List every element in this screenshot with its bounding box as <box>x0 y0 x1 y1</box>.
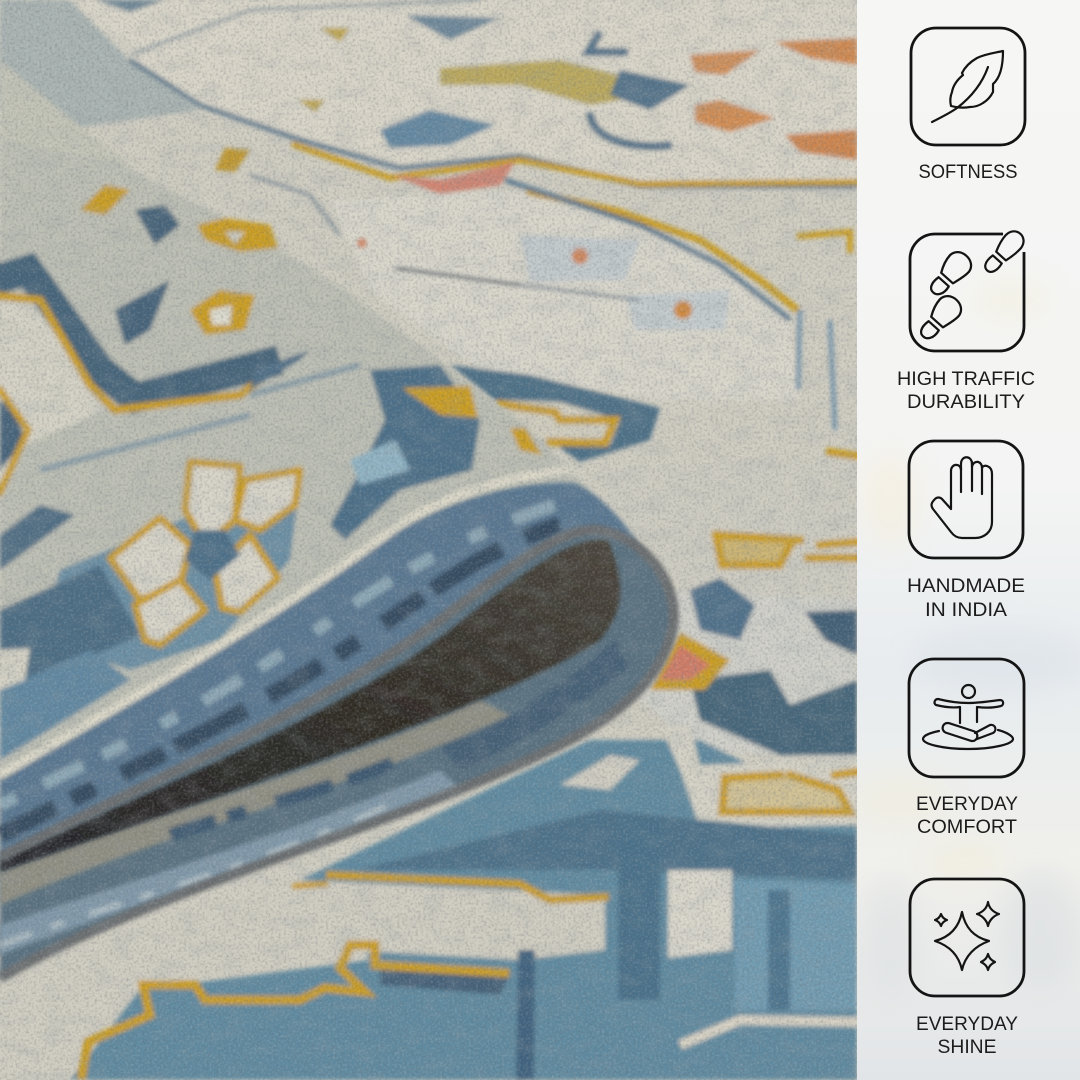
label: handmade in india <box>907 576 1025 621</box>
mottled and woven texture overlay <box>0 0 857 1080</box>
feature: handmade in india <box>907 441 1025 621</box>
label: everyday shine: EVERYDAY <box>916 1014 1018 1035</box>
label: handmade in india: HANDMADE <box>907 576 1025 597</box>
label: everyday comfort: EVERYDAY <box>916 794 1018 815</box>
icon: meditating figure <box>909 659 1024 777</box>
label: handmade in india: IN INDIA <box>925 600 1007 621</box>
icon: sparkles <box>910 879 1024 996</box>
ground rug: upper medallion <box>0 0 857 1080</box>
feature: everyday comfort <box>909 659 1024 838</box>
dark cavity under the fold <box>0 540 620 872</box>
icon: footprints <box>910 227 1028 351</box>
label: high traffic durability: DURABILITY <box>907 392 1025 413</box>
flower motif <box>110 462 300 645</box>
rolled rug flap <box>0 62 588 768</box>
fold underlay <box>0 530 674 978</box>
feature: high traffic durability <box>897 227 1035 413</box>
label: everyday comfort: COMFORT <box>917 817 1017 838</box>
label: everyday shine <box>916 1014 1018 1058</box>
front band of the fold <box>0 470 645 857</box>
icon: feather <box>911 28 1025 145</box>
label: high traffic durability <box>897 369 1035 413</box>
white feature panel <box>850 0 1080 1080</box>
label: everyday comfort <box>916 794 1018 838</box>
label: softness: SOFTNESS <box>918 162 1018 183</box>
label: high traffic durability: HIGH TRAFFIC <box>897 369 1035 390</box>
lower layer of the fold <box>0 640 628 955</box>
icon: hand <box>909 441 1023 558</box>
feature: everyday shine <box>910 879 1024 1058</box>
rug photograph <box>0 0 857 1080</box>
grey binding edge <box>0 530 674 978</box>
feature: softness <box>911 28 1025 183</box>
label: everyday shine: SHINE <box>938 1037 996 1058</box>
